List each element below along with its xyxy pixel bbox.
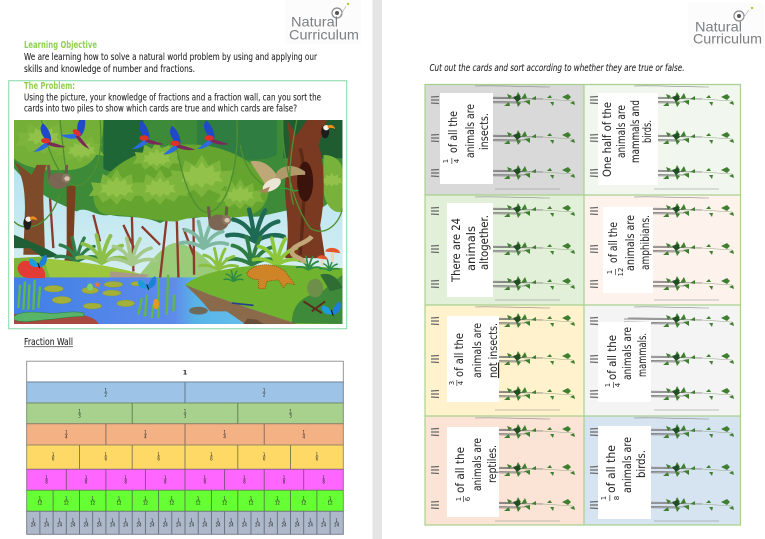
row: quarters: 4 bbox=[223, 434, 226, 439]
heading: The Problem: The Problem: bbox=[24, 81, 75, 92]
chameleon and bushes bbox=[292, 275, 342, 324]
row: twelfths: 1 bbox=[65, 496, 68, 501]
row: thirds: 1 bbox=[184, 408, 187, 413]
text block: problem statement: cards into two piles to show which cards are true and which cards are false? bbox=[24, 104, 297, 114]
row: twelfths: 1 bbox=[329, 496, 332, 501]
row: quarters: 1 bbox=[303, 429, 306, 434]
row: halves: 2 bbox=[105, 392, 108, 397]
row: twelfths: 12 bbox=[90, 501, 96, 506]
card: one half mammals and birds bbox=[584, 84, 741, 195]
row: twelfths: 12 bbox=[222, 501, 228, 506]
snake bbox=[292, 236, 312, 263]
row: twenty-fourths: 24 bbox=[334, 523, 340, 528]
row: twenty-fourths: 1 bbox=[204, 518, 207, 523]
card: one eighth birds: of all the bbox=[604, 445, 618, 493]
text block: learning objective: We are learning how to solve a natural world problem by using and applying our bbox=[24, 52, 317, 63]
logo: Natural Curriculum, left page: Natural bbox=[291, 14, 338, 30]
row: eighths: 1 bbox=[322, 475, 325, 480]
row: twenty-fourths bbox=[27, 511, 343, 534]
row: quarters: 1 bbox=[144, 429, 147, 434]
row: sixths: 1 bbox=[105, 452, 108, 457]
row: twelfths: 1 bbox=[303, 496, 306, 501]
row: twenty-fourths: 1 bbox=[335, 518, 338, 523]
card: 24 animals altogether: There are 24 bbox=[449, 218, 463, 283]
row: halves: 1 bbox=[263, 388, 266, 392]
panel: cards grid bbox=[425, 84, 741, 525]
row: twelfths: 1 bbox=[118, 496, 121, 501]
jaguar bbox=[247, 265, 295, 289]
row: twenty-fourths: 1 bbox=[111, 518, 114, 523]
row: eighths: 8 bbox=[204, 480, 207, 485]
logo: Natural Curriculum, left page: Curriculum bbox=[289, 26, 359, 42]
card: one sixth reptiles: of all the bbox=[453, 447, 467, 493]
card: one sixth reptiles: 6 bbox=[464, 496, 472, 501]
row: quarters: 4 bbox=[144, 434, 147, 439]
row: eighths: 8 bbox=[124, 480, 127, 485]
row: twelfths: 12 bbox=[169, 501, 175, 506]
card: one eighth birds: animals are bbox=[620, 437, 634, 493]
card: one half mammals and birds: One half of the bbox=[600, 102, 614, 177]
row: twenty-fourths: 24 bbox=[202, 523, 208, 528]
row: twenty-fourths: 24 bbox=[308, 523, 313, 528]
small animals bbox=[87, 283, 93, 291]
red flower bbox=[17, 261, 45, 278]
card: one twelfth amphibians bbox=[584, 195, 741, 305]
card: one quarter mammals: mammals. bbox=[635, 333, 649, 377]
row: sixths: 1 bbox=[210, 452, 213, 457]
row: quarters: 1 bbox=[223, 429, 226, 434]
row: twenty-fourths: 1 bbox=[164, 518, 167, 523]
chart: fraction wall bbox=[27, 361, 343, 534]
card: one quarter mammals: 4 bbox=[614, 382, 622, 387]
row: twenty-fourths: 1 bbox=[58, 518, 61, 523]
row: twenty-fourths: 24 bbox=[123, 523, 129, 528]
reeds bbox=[18, 275, 174, 318]
card: one quarter insects: of all the bbox=[446, 111, 460, 153]
row: twelfths: 1 bbox=[197, 496, 200, 501]
row: twelfths: 12 bbox=[64, 501, 69, 506]
row: eighths: 8 bbox=[164, 480, 167, 485]
row: thirds: 3 bbox=[78, 413, 81, 418]
row: halves bbox=[27, 382, 343, 403]
row: eighths: 1 bbox=[45, 475, 48, 480]
row: quarters: 1 bbox=[65, 429, 68, 434]
row: twenty-fourths: 24 bbox=[84, 523, 89, 528]
row: twelfths bbox=[27, 490, 343, 511]
card: 24 animals altogether: altogether. bbox=[477, 215, 491, 270]
card: one eighth birds bbox=[584, 416, 741, 525]
card: one half mammals and birds: mammals and bbox=[628, 100, 642, 163]
row: sixths: 1 bbox=[52, 452, 55, 457]
crocodile bbox=[14, 312, 84, 322]
card: three quarters not insects: 3 bbox=[448, 381, 456, 385]
row: eighths bbox=[27, 469, 343, 490]
text block: learning objective bbox=[24, 52, 317, 75]
card: one eighth birds: birds. bbox=[634, 450, 648, 478]
row: sixths: 1 bbox=[316, 452, 319, 457]
logo: Natural Curriculum, right page: Natural bbox=[695, 18, 742, 34]
row: twenty-fourths: 1 bbox=[270, 518, 273, 523]
macaws bbox=[33, 111, 229, 154]
row: halves: 1 bbox=[105, 388, 108, 392]
row: sixths: 6 bbox=[263, 457, 266, 462]
instruction text: Cut out the cards and sort according to whether they are true or false. bbox=[430, 63, 684, 74]
row: twelfths: 12 bbox=[248, 501, 254, 506]
row: thirds: 1 bbox=[289, 408, 292, 413]
row: twenty-fourths: 1 bbox=[45, 518, 48, 523]
row: twelfths: 1 bbox=[276, 496, 279, 501]
row: sixths: 6 bbox=[52, 457, 55, 462]
row: sixths bbox=[27, 445, 343, 469]
row: twenty-fourths: 1 bbox=[309, 518, 312, 523]
row: twelfths: 1 bbox=[91, 496, 94, 501]
row: twenty-fourths: 1 bbox=[283, 518, 286, 523]
row: twelfths: 1 bbox=[171, 496, 174, 501]
card: three quarters not insects bbox=[425, 305, 584, 416]
row: twelfths: 1 bbox=[39, 496, 42, 501]
card: one sixth reptiles bbox=[425, 416, 584, 525]
row: twenty-fourths: 24 bbox=[255, 523, 261, 528]
heading: Fraction Wall: Fraction Wall bbox=[24, 337, 73, 348]
row: eighths: 8 bbox=[322, 480, 325, 485]
row: twelfths: 12 bbox=[301, 501, 307, 506]
card: three quarters not insects: 4 bbox=[457, 380, 465, 385]
card: one half mammals and birds: birds. bbox=[640, 120, 654, 143]
card: one twelfth amphibians: animals are bbox=[623, 215, 637, 271]
row: quarters: 4 bbox=[303, 434, 306, 439]
row: eighths: 1 bbox=[243, 475, 246, 480]
row: eighths: 8 bbox=[243, 480, 246, 485]
text block: problem statement: Using the picture, your knowledge of fractions and a fraction wall, can you sort the bbox=[24, 92, 321, 104]
row: twenty-fourths: 1 bbox=[230, 518, 233, 523]
card: one half mammals and birds: animals are bbox=[614, 105, 628, 158]
row: sixths: 6 bbox=[157, 457, 160, 462]
row: twenty-fourths: 24 bbox=[176, 523, 181, 528]
card: three quarters not insects: of all the bbox=[452, 333, 466, 377]
bird of prey bbox=[250, 161, 278, 192]
row: twenty-fourths: 24 bbox=[215, 523, 221, 528]
row: twenty-fourths: 24 bbox=[268, 523, 274, 528]
row: twelfths: 1 bbox=[144, 496, 147, 501]
card: one twelfth amphibians: amphibians. bbox=[638, 215, 652, 270]
vines bbox=[14, 120, 342, 231]
card: one twelfth amphibians: 12 bbox=[617, 268, 625, 276]
card: one quarter mammals bbox=[584, 305, 741, 416]
row: quarters: 4 bbox=[65, 434, 68, 439]
row: twenty-fourths: 1 bbox=[256, 518, 259, 523]
row: halves: 2 bbox=[263, 392, 266, 397]
grey gutter between pages bbox=[372, 0, 382, 539]
row: twenty-fourths: 1 bbox=[138, 518, 141, 523]
row: sixths: 6 bbox=[105, 457, 108, 462]
row: twenty-fourths: 1 bbox=[151, 518, 154, 523]
row: twenty-fourths: 24 bbox=[110, 523, 115, 528]
row: twenty-fourths: 24 bbox=[189, 523, 195, 528]
row: twenty-fourths: 1 bbox=[124, 518, 127, 523]
row: eighths: 1 bbox=[124, 475, 127, 480]
row: twenty-fourths: 1 bbox=[322, 518, 325, 523]
card: three quarters not insects: animals are bbox=[470, 323, 484, 378]
row: twelfths: 12 bbox=[116, 501, 122, 506]
row: quarters bbox=[27, 424, 343, 445]
card: one quarter mammals: of all the bbox=[605, 335, 619, 380]
row: eighths: 8 bbox=[85, 480, 88, 485]
row: twelfths: 1 bbox=[250, 496, 253, 501]
row: twelfths: 12 bbox=[37, 501, 43, 506]
row: thirds: 3 bbox=[289, 413, 292, 418]
row: twenty-fourths: 24 bbox=[163, 523, 168, 528]
card: one quarter insects: 1 bbox=[442, 159, 450, 163]
card: one quarter mammals: animals are bbox=[620, 327, 634, 380]
card: 24 animals altogether bbox=[425, 195, 584, 305]
row: whole: 1 bbox=[183, 368, 188, 376]
row: thirds bbox=[27, 403, 343, 424]
card: one eighth birds: 1 bbox=[600, 496, 608, 500]
card: one quarter insects: animals are bbox=[463, 104, 477, 158]
logo: Natural Curriculum, left page bbox=[285, 0, 361, 44]
row: twenty-fourths: 1 bbox=[217, 518, 220, 523]
illustration: rainforest scene bbox=[14, 120, 342, 324]
row: twenty-fourths: 24 bbox=[70, 523, 76, 528]
row: twenty-fourths: 24 bbox=[295, 523, 300, 528]
row: eighths: 1 bbox=[85, 475, 88, 480]
panel: the problem bbox=[9, 81, 347, 329]
row: twelfths: 1 bbox=[223, 496, 226, 501]
card: one twelfth amphibians: 1 bbox=[606, 270, 614, 274]
row: twenty-fourths: 24 bbox=[321, 523, 327, 528]
row: thirds: 1 bbox=[78, 408, 81, 413]
row: twenty-fourths: 1 bbox=[243, 518, 246, 523]
row: sixths: 6 bbox=[210, 457, 213, 462]
row: twelfths: 12 bbox=[143, 501, 148, 506]
row: eighths: 8 bbox=[45, 480, 48, 485]
row: twenty-fourths: 24 bbox=[229, 523, 234, 528]
row: sixths: 6 bbox=[316, 457, 319, 462]
mushrooms bbox=[317, 248, 340, 260]
row: eighths: 1 bbox=[204, 475, 207, 480]
card: one quarter insects: 4 bbox=[453, 158, 461, 163]
card: 24 animals altogether: animals bbox=[464, 226, 478, 271]
card: one quarter insects: insects. bbox=[477, 113, 491, 150]
row: twelfths: 12 bbox=[275, 501, 280, 506]
card grid lines bbox=[425, 84, 741, 525]
row: twenty-fourths: 1 bbox=[98, 518, 101, 523]
row: twenty-fourths: 1 bbox=[296, 518, 299, 523]
row: sixths: 1 bbox=[263, 452, 266, 457]
row: twelfths: 12 bbox=[196, 501, 201, 506]
card: one sixth reptiles: animals are bbox=[470, 438, 484, 491]
text block: problem statement bbox=[24, 92, 321, 114]
card: one sixth reptiles: 1 bbox=[455, 497, 463, 501]
row: twenty-fourths: 24 bbox=[57, 523, 63, 528]
logo: Natural Curriculum, right page bbox=[688, 3, 764, 47]
row: twenty-fourths: 1 bbox=[72, 518, 75, 523]
row: twenty-fourths: 24 bbox=[242, 523, 247, 528]
row: twenty-fourths: 24 bbox=[31, 523, 36, 528]
card: one sixth reptiles: reptiles. bbox=[485, 445, 499, 483]
card: one quarter mammals: 1 bbox=[604, 383, 612, 387]
row: eighths: 1 bbox=[283, 475, 286, 480]
row: thirds: 3 bbox=[184, 413, 187, 418]
text block: learning objective: skills and knowledge of number and fractions. bbox=[24, 64, 195, 75]
row: whole bbox=[27, 361, 343, 382]
row: eighths: 8 bbox=[283, 480, 286, 485]
row: eighths: 1 bbox=[164, 475, 167, 480]
card: three quarters not insects: not insects. bbox=[486, 323, 500, 378]
row: sixths: 1 bbox=[157, 452, 160, 457]
row: twenty-fourths: 1 bbox=[190, 518, 193, 523]
card: one eighth birds: 8 bbox=[613, 496, 621, 500]
row: twelfths: 12 bbox=[328, 501, 333, 506]
row: twenty-fourths: 24 bbox=[281, 523, 287, 528]
card: one twelfth amphibians: of all the bbox=[606, 222, 620, 263]
card: one quarter insects bbox=[425, 84, 584, 195]
heading: Learning Objective: Learning Objective bbox=[24, 40, 97, 51]
row: twenty-fourths: 24 bbox=[136, 523, 142, 528]
row: twenty-fourths: 24 bbox=[97, 523, 102, 528]
logo: Natural Curriculum, right page: Curriculum bbox=[693, 30, 762, 46]
row: twenty-fourths: 1 bbox=[32, 518, 35, 523]
row: twenty-fourths: 24 bbox=[44, 523, 49, 528]
row: twenty-fourths: 1 bbox=[85, 518, 88, 523]
row: twenty-fourths: 24 bbox=[150, 523, 155, 528]
row: twenty-fourths: 1 bbox=[177, 518, 180, 523]
